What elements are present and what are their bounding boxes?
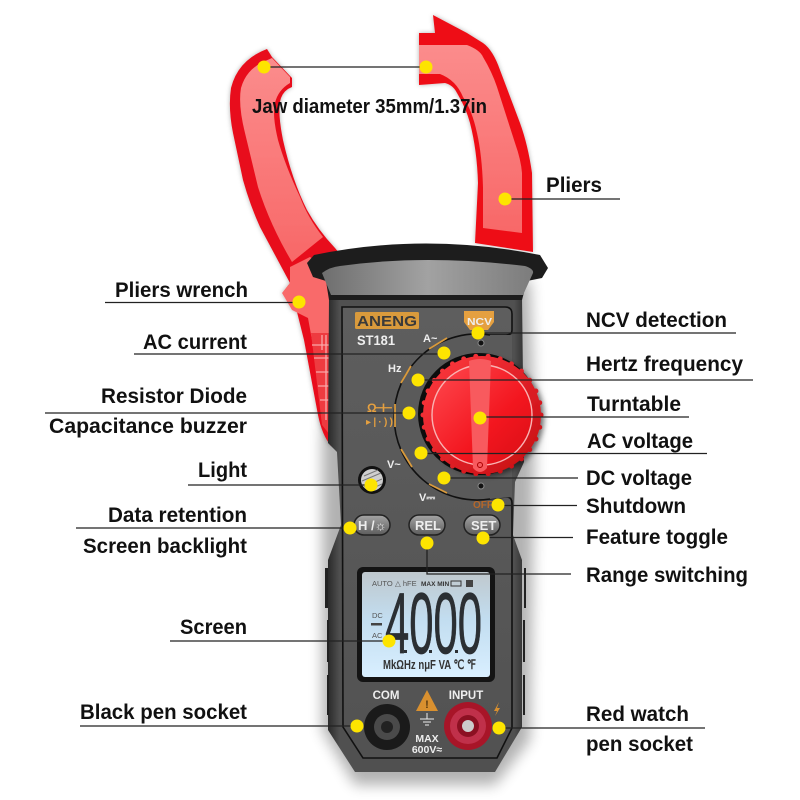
NCV badge: NCV	[467, 316, 492, 328]
label: NCV detection: NCV detection	[586, 309, 727, 332]
top cap inset	[322, 260, 533, 295]
red socket	[444, 702, 492, 750]
LCD screen: MkΩHz nμF VA ℃ ℉	[383, 657, 476, 672]
label: data retention: Data retention	[108, 504, 247, 527]
sockets: COM	[373, 690, 399, 702]
sockets: 600V≈	[412, 744, 442, 756]
LCD screen	[357, 567, 495, 682]
label: capacitance buzzer: Capacitance buzzer	[49, 415, 247, 438]
label: resistor diode: Resistor Diode	[101, 385, 247, 408]
label: screen backlight: Screen backlight	[83, 535, 247, 558]
label: black pen socket: Black pen socket	[80, 701, 247, 724]
backlight sensor	[358, 466, 386, 494]
black socket	[364, 704, 410, 750]
dial labels: V⎓	[419, 492, 435, 504]
clamp meter body	[307, 244, 548, 772]
label: pliers wrench: Pliers wrench	[115, 279, 248, 302]
sockets: INPUT	[449, 690, 483, 702]
NCV badge	[464, 311, 494, 330]
label: AC voltage: AC voltage	[587, 430, 693, 453]
label: red watch: Red watch	[586, 703, 689, 726]
label: light: Light	[198, 459, 247, 482]
label: shutdown: Shutdown	[586, 495, 686, 518]
yellow marker dots	[258, 60, 512, 734]
dial labels: V~	[387, 459, 401, 471]
buttons: H /☼	[358, 518, 387, 533]
soft shadow behind device	[322, 280, 535, 785]
LCD screen: AC	[372, 631, 383, 640]
LCD screen: △ hFE	[395, 579, 417, 588]
label: jaw diameter: Jaw diameter 35mm/1.37in	[252, 96, 487, 118]
top cap	[307, 244, 548, 300]
leader lines	[45, 67, 753, 728]
model number: ST181	[357, 332, 395, 348]
buttons: REL	[415, 518, 441, 533]
sockets: MAX	[415, 733, 439, 745]
sockets: !	[425, 699, 429, 711]
turntable knob	[418, 353, 541, 475]
label: turntable: Turntable	[587, 393, 681, 416]
dial labels: Ω ⊣⊢	[367, 401, 393, 415]
label: AC current: AC current	[143, 331, 247, 354]
label: screen: Screen	[180, 616, 247, 639]
label: feature toggle: Feature toggle	[586, 526, 728, 549]
left jaw of pliers	[230, 49, 345, 446]
LCD screen: AUTO	[372, 579, 393, 588]
brand logo: ANENG	[357, 313, 417, 330]
body housing	[328, 296, 524, 772]
dial labels: A~	[423, 333, 438, 345]
dial labels: Hz	[388, 363, 402, 375]
label: pliers: Pliers	[546, 174, 602, 197]
dial labels: OFF	[473, 500, 493, 511]
front panel	[342, 307, 512, 758]
LCD screen: DC	[372, 611, 383, 620]
buttons	[354, 515, 500, 535]
dial labels: ▸|·))	[366, 417, 393, 428]
LCD screen: MAX MIN	[421, 581, 449, 588]
side grip tabs	[325, 568, 526, 715]
right jaw of pliers	[419, 15, 533, 252]
label: pen socket: pen socket	[586, 733, 693, 756]
label: DC voltage: DC voltage	[586, 467, 692, 490]
label: hertz frequency: Hertz frequency	[586, 353, 743, 376]
sockets	[364, 690, 500, 756]
buttons: SET	[471, 518, 496, 533]
dial well	[394, 334, 512, 500]
dial labels	[366, 333, 493, 511]
label: range switching: Range switching	[586, 564, 748, 587]
knob pointer	[469, 359, 491, 472]
LCD screen: 4000	[385, 576, 482, 672]
